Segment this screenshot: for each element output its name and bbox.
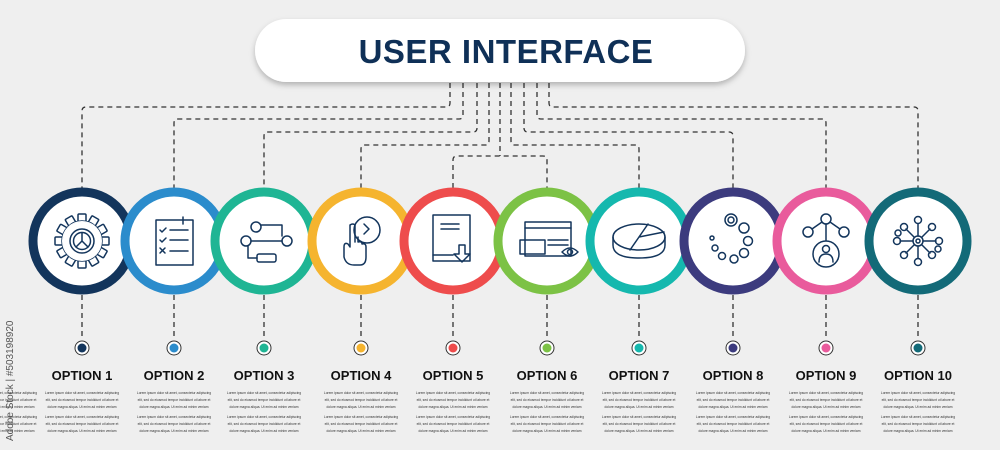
icon: checklist [156, 217, 193, 265]
watermark id: Adobe Stock | #503198920 [5, 320, 16, 441]
icon: flow [241, 222, 292, 262]
icon: browser eye [520, 222, 578, 256]
option labels: OPTION 3 [234, 368, 294, 383]
option labels: OPTION 8 [703, 368, 763, 383]
option labels: OPTION 1 [52, 368, 112, 383]
icon: hub [894, 216, 942, 266]
connectors [82, 83, 918, 340]
title: USER INTERFACE [359, 33, 653, 70]
icon: gear [55, 214, 109, 268]
option labels: OPTION 6 [517, 368, 577, 383]
description texts [0, 391, 955, 433]
option labels: OPTION 9 [796, 368, 856, 383]
icon: pie chart [613, 224, 665, 258]
option labels: OPTION 10 [884, 368, 952, 383]
icon: hand touch [344, 217, 380, 265]
dots [75, 341, 925, 355]
option labels [52, 368, 952, 383]
icon: document download [433, 215, 470, 262]
icon: user network [803, 214, 849, 267]
title [255, 19, 745, 82]
icon: loader [710, 214, 752, 263]
option labels: OPTION 7 [609, 368, 669, 383]
option labels: OPTION 4 [331, 368, 392, 383]
option labels: OPTION 2 [144, 368, 204, 383]
circles [33, 192, 967, 290]
option labels: OPTION 5 [423, 368, 483, 383]
icons [55, 214, 942, 268]
